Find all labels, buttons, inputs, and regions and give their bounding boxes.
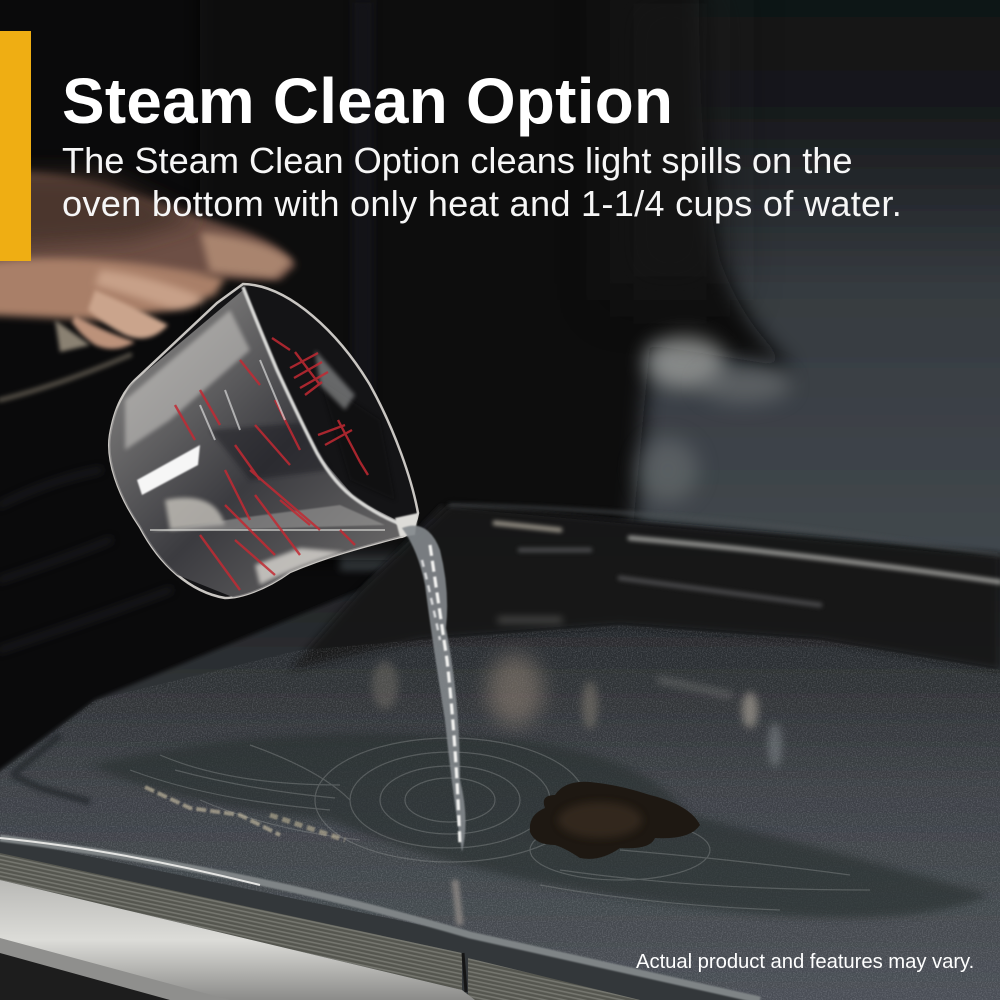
glass highlights [125, 310, 250, 450]
floor glitter texture [0, 620, 1000, 1000]
oven floor [0, 505, 1000, 1000]
water stream [402, 526, 466, 852]
description text: oven bottom with only heat and 1-1/4 cups of water. [62, 183, 902, 224]
accent bar [0, 31, 31, 261]
hand holding cup [0, 172, 296, 352]
cup body [109, 284, 418, 598]
glass left side [100, 290, 410, 600]
description text [62, 140, 902, 224]
cup rim [243, 287, 412, 528]
disclaimer note: Actual product and features may vary. [636, 951, 974, 973]
water puddle on floor [90, 733, 990, 918]
floor highlights [0, 355, 1000, 695]
oven front frame [0, 838, 760, 1000]
title: Steam Clean Option [62, 65, 673, 137]
oven back wall [200, 0, 1000, 570]
floor recess edge [12, 735, 90, 802]
red measurement markings [175, 338, 368, 590]
description text: The Steam Clean Option cleans light spills on the [62, 140, 853, 181]
burnt spill [530, 782, 700, 859]
measuring cup [100, 284, 418, 600]
floor upper reflective band [290, 505, 1000, 670]
